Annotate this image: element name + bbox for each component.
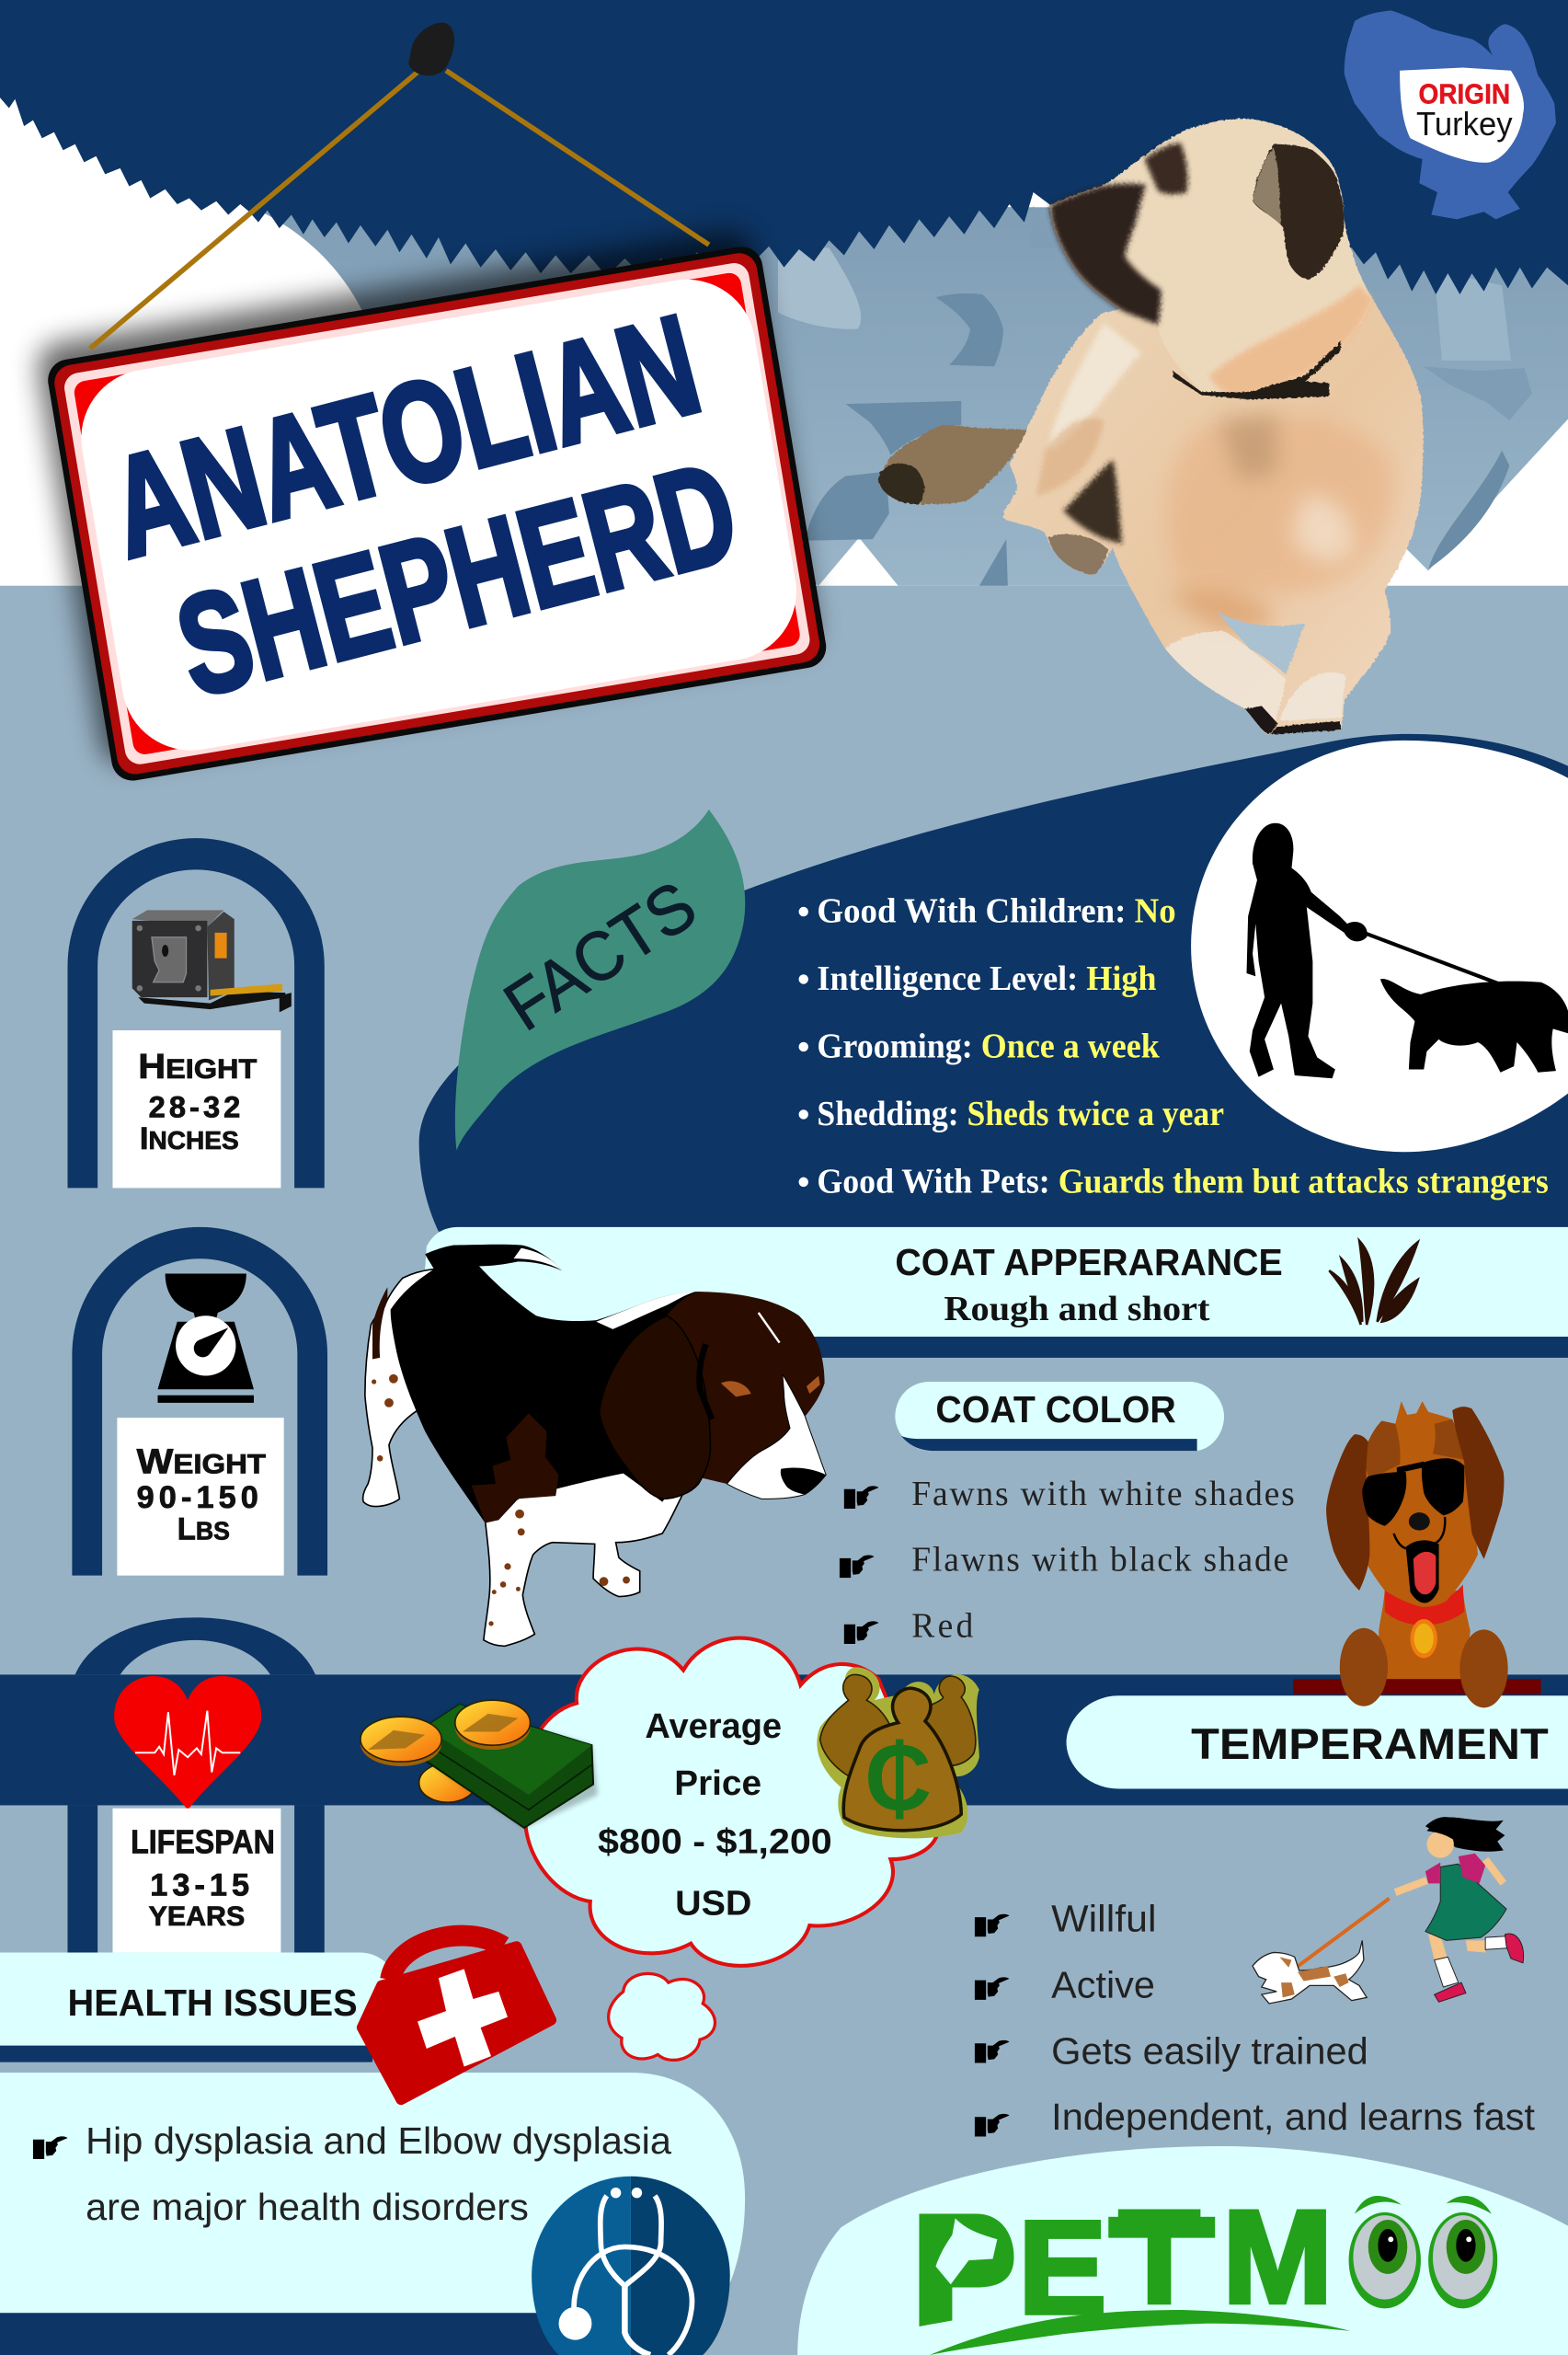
temperament heading: TEMPERAMENT <box>1191 1720 1549 1769</box>
health issues band <box>0 1952 406 2062</box>
arms <box>1395 1880 1426 1892</box>
title: SHEPHERD <box>163 431 751 727</box>
title <box>96 284 751 734</box>
icon: heart <box>114 1676 261 1809</box>
title: ANATOLIAN <box>96 284 714 588</box>
icon: pointing hand <box>844 1486 878 1509</box>
ear <box>1253 144 1345 280</box>
height label: INCHES <box>140 1121 239 1156</box>
origin badge: turkey with Turkey label <box>1345 10 1556 219</box>
coat color list: Flawns with black shade <box>911 1542 1288 1580</box>
small thought cloud <box>609 1973 715 2060</box>
back leg <box>1466 1940 1485 1952</box>
health issues panel <box>0 2073 745 2355</box>
spots <box>372 1374 630 1626</box>
height label <box>112 1030 280 1188</box>
weight label: LBS <box>177 1511 230 1546</box>
white circle with walker <box>1191 741 1568 1152</box>
icon: money bags <box>817 1667 979 1838</box>
height label: HEIGHT <box>138 1047 257 1086</box>
panel: coat appearance <box>420 1227 1568 1358</box>
price text: $800 - $1,200 <box>598 1822 832 1861</box>
icon: pointing hand <box>975 2114 1009 2136</box>
logo eyes <box>1349 2196 1497 2308</box>
white front legs and belly <box>484 1457 706 1646</box>
brow patch <box>1144 143 1187 194</box>
dark muzzle <box>1050 184 1161 325</box>
lifespan label: 13-15 <box>150 1867 249 1902</box>
temperament pill <box>1067 1695 1568 1788</box>
panel: lifespan <box>67 1617 325 1956</box>
logo panel <box>797 2146 1568 2355</box>
panel: weight <box>72 1227 327 1576</box>
health list: are major health disorders <box>86 2186 529 2228</box>
logo swoosh <box>930 2310 1350 2355</box>
temperament list: Independent, and learns fast <box>1051 2096 1536 2138</box>
illustration: beagle <box>363 1245 826 1646</box>
head <box>667 1292 826 1499</box>
coat color list: Red <box>911 1608 973 1646</box>
icon: pointing hand <box>840 1556 874 1578</box>
paws <box>1340 1628 1388 1706</box>
lifespan label <box>112 1809 280 1952</box>
nail and rope <box>90 23 709 349</box>
coat appearance value: Rough and short <box>944 1290 1210 1328</box>
facts list: Good With Children: No <box>817 892 1176 930</box>
sunglasses <box>1362 1458 1464 1526</box>
illustration: dog with sunglasses <box>1293 1401 1541 1707</box>
price cloud <box>525 1638 939 1966</box>
ear <box>600 1315 710 1499</box>
head <box>1050 119 1373 397</box>
facts list: Good With Pets: Guards them but attacks strangers <box>817 1163 1549 1200</box>
coat color heading: COAT COLOR <box>935 1388 1176 1430</box>
black body and tail <box>391 1245 736 1523</box>
price text: Average <box>645 1706 782 1745</box>
temperament list: Willful <box>1051 1898 1157 1940</box>
price text <box>598 1706 832 1923</box>
torn navy sky <box>0 0 1568 294</box>
panel: facts <box>419 734 1568 1232</box>
lifespan label: LIFESPAN <box>131 1823 275 1861</box>
nose and mouth <box>1409 1512 1430 1531</box>
icon: woman walking dog silhouette <box>1247 823 1568 1078</box>
brown saddle patch <box>472 1413 559 1523</box>
temperament list: Gets easily trained <box>1051 2029 1368 2072</box>
facts list <box>799 892 1549 1200</box>
price text: Price <box>674 1763 761 1802</box>
eyes <box>721 1381 751 1396</box>
icon: pointing hand <box>975 1977 1009 2000</box>
icon: scale <box>157 1273 254 1403</box>
price text: USD <box>675 1884 751 1923</box>
Anatolian Shepherd dog photo <box>878 119 1424 734</box>
weight label: WEIGHT <box>137 1442 266 1481</box>
head <box>1361 1401 1478 1607</box>
temperament list <box>975 1898 1536 2138</box>
icon: first aid kit <box>362 1936 551 2099</box>
nose <box>781 1467 826 1494</box>
collar <box>1173 341 1341 399</box>
coat color list: Fawns with white shades <box>911 1476 1295 1513</box>
rear paw <box>878 425 1027 504</box>
dress <box>1425 1864 1506 1940</box>
icon: pointing hand <box>975 1914 1009 1936</box>
FACTS heading: FACTS <box>491 866 709 1045</box>
dog <box>1253 1940 1367 2004</box>
navy lifespan band <box>0 1674 1568 1805</box>
sign shadow <box>34 227 818 767</box>
panel: height <box>67 838 325 1188</box>
ears <box>1326 1434 1369 1591</box>
icon: pointing hand <box>33 2136 67 2159</box>
facts list: Grooming: Once a week <box>817 1028 1160 1065</box>
icon: pointing hand <box>975 2040 1009 2062</box>
icon: stethoscope <box>532 2177 730 2355</box>
lifespan label: YEARS <box>149 1901 245 1932</box>
hanging sign <box>45 244 830 784</box>
weight label <box>117 1418 284 1576</box>
hair and head <box>1425 1817 1505 1852</box>
health list: Hip dysplasia and Elbow dysplasia <box>86 2120 671 2162</box>
icon: tape measure <box>132 910 292 1012</box>
body <box>1003 256 1424 734</box>
background mountains and camouflage <box>240 202 1568 586</box>
facts list: Shedding: Sheds twice a year <box>817 1096 1224 1133</box>
weight label: 90-150 <box>137 1480 258 1515</box>
height label: 28-32 <box>149 1090 240 1124</box>
origin label: ORIGIN <box>1419 80 1510 110</box>
icon: pointing hand <box>844 1621 878 1644</box>
front leg <box>1428 1935 1448 1960</box>
coat color pill <box>895 1382 1224 1451</box>
icon: grass <box>1329 1241 1418 1325</box>
coat color list <box>840 1476 1295 1646</box>
facts list: Intelligence Level: High <box>817 960 1157 998</box>
health list <box>33 2120 671 2228</box>
coat appearance heading: COAT APPERARANCE <box>895 1241 1283 1283</box>
origin label: Turkey <box>1416 105 1513 143</box>
health issues heading: HEALTH ISSUES <box>67 1982 358 2024</box>
leaf <box>455 810 745 1151</box>
cedi sign: ₵ <box>864 1726 932 1830</box>
origin label <box>1400 67 1524 163</box>
back leg and white stripe <box>363 1269 451 1507</box>
icon: cash and coins <box>361 1700 598 1828</box>
gap between legs <box>1217 611 1305 674</box>
peach fur shading <box>1166 414 1394 595</box>
logo word: PETM <box>919 2184 1333 2341</box>
illustration: girl walking dog <box>1253 1817 1524 2004</box>
white muzzle <box>727 1374 826 1499</box>
temperament list: Active <box>1051 1963 1155 2005</box>
front paws <box>1165 631 1286 734</box>
leash <box>1296 1899 1390 1968</box>
